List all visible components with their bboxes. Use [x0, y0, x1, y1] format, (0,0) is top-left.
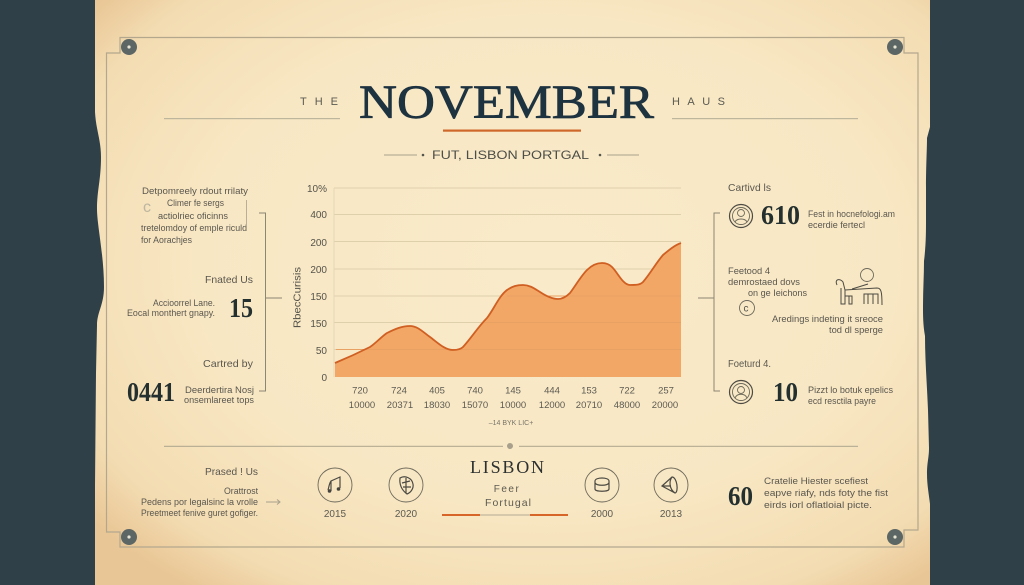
icon: portrait medallion	[730, 204, 752, 228]
x axis labels row one: 720	[352, 386, 368, 396]
intro text block: Detpomreely rdout rrilaty	[142, 186, 249, 196]
area chart	[292, 184, 681, 427]
x axis labels row two: 20371	[387, 400, 413, 411]
arrow	[266, 500, 280, 504]
y axis labels: 10%	[307, 184, 327, 195]
subtitle: FUT, LISBON PORTGAL	[432, 148, 589, 162]
panel: right column	[698, 182, 895, 407]
stat: 15: Eocal monthert gnapy.	[127, 308, 215, 318]
panel: bottom left note: Pedens por legalsinc la vrolle	[141, 497, 258, 507]
x axis labels row one: 740	[467, 386, 483, 396]
panel: bottom left note: Orattrost	[224, 486, 258, 496]
stat: 610: Fest in hocnefologi.am	[808, 209, 895, 219]
icon: small c badge	[740, 300, 754, 316]
timeline icon 2013: 2013	[660, 509, 683, 520]
panel: bottom left note	[141, 466, 280, 518]
x axis labels row two: 20000	[652, 400, 678, 411]
y axis labels: 400	[310, 210, 327, 221]
stat: 15	[127, 274, 253, 323]
right bracket	[698, 213, 720, 391]
x axis caption: –14 BYK LIC+	[489, 420, 533, 427]
chart line	[335, 243, 681, 363]
title: the: THE	[300, 96, 338, 108]
x axis labels row one: 145	[505, 386, 521, 396]
x axis labels row one: 405	[429, 386, 445, 396]
x axis labels row two: 15070	[462, 400, 488, 411]
feature block: demrostaed dovs	[728, 277, 801, 287]
timeline icon 2000	[585, 468, 619, 520]
stat: 15: Fnated Us	[205, 274, 253, 286]
y axis labels: 50	[316, 346, 327, 357]
stat: 60: eapve riafy, nds foty the fist	[764, 488, 889, 498]
stat: 10: 10	[773, 377, 798, 407]
stat: 15: 15	[229, 293, 253, 323]
stat: 60: 60	[728, 481, 753, 511]
stat: 60	[728, 476, 889, 511]
center label: Lisbon	[442, 457, 568, 516]
intro text block: for Aorachjes	[141, 235, 192, 245]
x axis labels row one: 724	[391, 386, 407, 396]
feature block: Aredings indeting it sreoce	[772, 314, 883, 324]
stat: 10: Foeturd 4.	[728, 358, 771, 370]
stat: 60: Cratelie Hiester scefiest	[764, 476, 869, 486]
stat: 610: ecerdie fertecl	[808, 220, 865, 230]
left bracket	[259, 213, 282, 391]
feature block: tod dl sperge	[829, 325, 883, 335]
timeline icon 2020	[389, 468, 423, 520]
intro text block: actiolriec oficinns	[158, 211, 229, 221]
timeline icon 2000: 2000	[591, 509, 614, 520]
intro text block: tretelomdoy of emple riculd	[141, 223, 247, 233]
timeline icon 2015	[318, 468, 352, 520]
chart faint gridlines over area	[336, 296, 681, 350]
x axis labels row one	[352, 386, 674, 396]
y axis labels: 0	[321, 373, 327, 384]
x axis labels row one: 444	[544, 386, 560, 396]
title rule left	[164, 118, 340, 119]
feature block: Feetood 4	[728, 266, 770, 276]
stat: 10: Pizzt lo botuk epelics	[808, 385, 893, 395]
x axis labels row one: 722	[619, 386, 635, 396]
stat: 60: eirds iorl oflatloial picte.	[764, 500, 872, 510]
x axis labels row two: 12000	[539, 400, 565, 411]
y axis labels	[307, 184, 327, 384]
center label: Lisbon: Feer	[494, 484, 520, 495]
x axis labels row two: 18030	[424, 400, 450, 411]
y axis labels: 150	[310, 319, 327, 330]
timeline icon 2020: 2020	[395, 509, 418, 520]
panel: bottom left note: Prased ! Us	[205, 466, 258, 478]
stat: 610: 610	[761, 200, 800, 230]
y axis labels: 200	[310, 265, 327, 276]
panel: bottom left note: Preetmeet fenive guret gofiger.	[141, 508, 258, 518]
feature block: on ge Ieichons	[748, 288, 808, 298]
decorative frame	[106, 38, 918, 547]
progress bar	[442, 514, 568, 516]
icon: small c badge: c	[744, 304, 748, 314]
x axis labels row two: 20710	[576, 400, 602, 411]
y axis labels: 200	[310, 238, 327, 249]
stat: 610	[728, 182, 895, 230]
intro text block: Climer fe sergs	[167, 198, 224, 208]
bottom divider	[164, 443, 858, 449]
stat: 610: Cartivd ls	[728, 182, 771, 194]
intro text block	[141, 186, 249, 245]
title rule right	[672, 118, 858, 119]
x axis labels row two	[349, 400, 678, 411]
stat: 0441: onsemlareet tops	[184, 395, 254, 405]
stat: 0441: Cartred by	[203, 358, 254, 370]
timeline icon 2015: 2015	[324, 509, 347, 520]
icon: chair and table	[836, 268, 882, 305]
panel: left column	[127, 186, 282, 407]
x axis labels row two: 10000	[349, 400, 375, 411]
center label: Lisbon: Fortugal	[485, 497, 531, 509]
center label: Lisbon: LISBON	[470, 457, 544, 477]
intro text block: c	[143, 199, 151, 216]
corner bolt top left	[121, 39, 137, 55]
stat: 0441: 0441	[127, 377, 175, 407]
timeline icon 2013	[654, 468, 688, 520]
corner bolt bottom left	[121, 529, 137, 545]
title: november: NOVEMBER	[359, 76, 654, 129]
stat: 0441	[127, 358, 254, 407]
stat: 10	[728, 358, 893, 407]
chart area fill	[335, 243, 681, 377]
x axis labels row one: 257	[658, 386, 674, 396]
y axis title: RbecCurisis	[292, 267, 304, 328]
title: haus: HAUS	[672, 96, 725, 108]
title block	[164, 76, 858, 132]
corner bolt bottom right	[887, 529, 903, 545]
x axis labels row two: 48000	[614, 400, 640, 411]
corner bolt top right	[887, 39, 903, 55]
title orange underline	[443, 130, 581, 132]
x axis labels row two: 10000	[500, 400, 526, 411]
y axis labels: 150	[310, 292, 327, 303]
x axis labels row one: 153	[581, 386, 597, 396]
stat: 0441: Deerdertira Nosj	[185, 385, 254, 395]
icon: ornate medallion	[730, 380, 752, 404]
stat: 10: ecd resctila payre	[808, 396, 876, 406]
feature block	[728, 266, 883, 335]
chart gridlines	[334, 188, 681, 377]
stat: 15: Accioorrel Lane.	[153, 298, 215, 308]
